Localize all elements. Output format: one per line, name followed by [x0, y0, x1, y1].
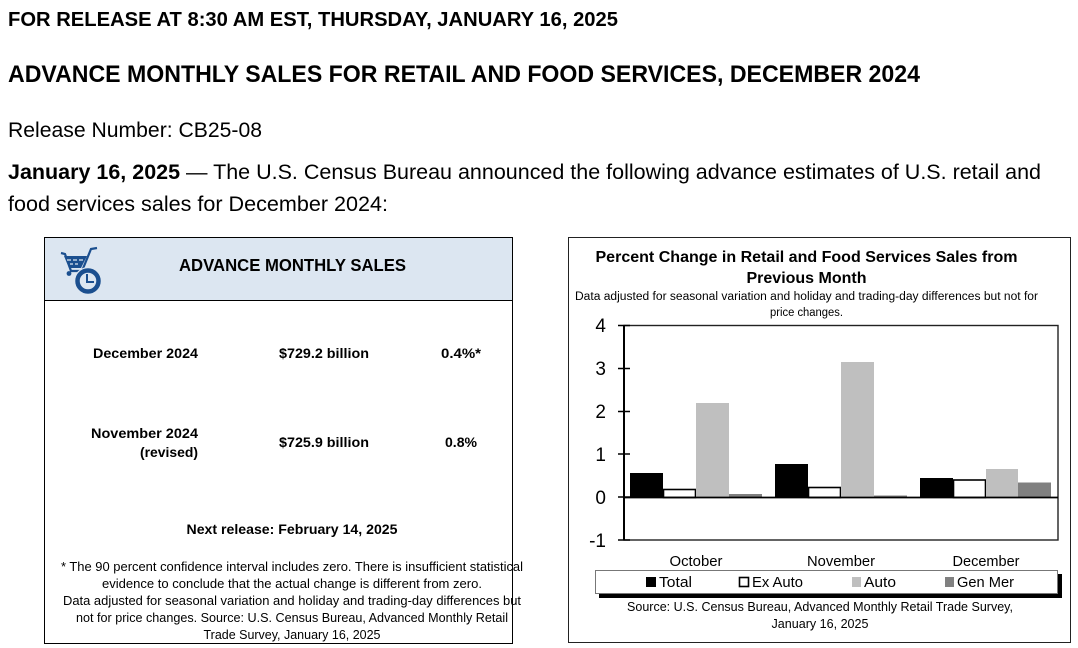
icon: shopping cart with clock: [61, 248, 102, 295]
next release: Next release: February 14, 2025: [186, 521, 398, 537]
chart title: Percent Change in Retail and Food Services Sales from: [596, 249, 1018, 266]
x axis labels: November: [807, 554, 875, 570]
y axis labels: [589, 316, 606, 552]
legend: Auto: [852, 575, 896, 591]
y axis labels: 4: [595, 316, 606, 337]
chart title: [596, 249, 1018, 287]
footnote: * The 90 percent confidence interval includes zero. There is insufficient statistical: [61, 560, 523, 574]
panel: percent change chart: [568, 238, 1070, 642]
row: November 2024 revised: $725.9 billion: [279, 434, 369, 450]
main title: ADVANCE MONTHLY SALES FOR RETAIL AND FOOD SERVICES, DECEMBER 2024: [8, 61, 921, 88]
legend: [596, 570, 1062, 598]
panel header: [44, 238, 512, 300]
chart source: Source: U.S. Census Bureau, Advanced Monthly Retail Trade Survey,: [627, 600, 1013, 614]
panel: advance monthly sales: [44, 238, 523, 644]
chart title: Previous Month: [746, 270, 866, 287]
footnote: [61, 560, 523, 642]
December bars: [920, 469, 1051, 498]
y axis labels: 1: [595, 445, 606, 466]
chart source: January 16, 2025: [772, 617, 869, 631]
bar chart: [624, 362, 1058, 498]
row: November 2024 revised: (revised): [140, 444, 198, 460]
row: November 2024 revised: 0.8%: [445, 434, 478, 450]
x axis labels: December: [952, 554, 1020, 570]
November bars: [775, 362, 907, 498]
x axis labels: October: [670, 554, 723, 570]
October bars: [630, 403, 762, 498]
intro paragraph: food services sales for December 2024:: [8, 193, 388, 216]
intro paragraph: [8, 161, 1041, 216]
footnote: evidence to conclude that the actual change is different from zero.: [102, 577, 482, 591]
footnote: not for price changes. Source: U.S. Census Bureau, Advanced Monthly Retail: [76, 611, 508, 625]
row: December 2024: December 2024: [93, 345, 198, 361]
row: December 2024: [93, 345, 482, 361]
plot frame and axes: [618, 326, 1058, 540]
row: December 2024: 0.4%*: [441, 345, 482, 361]
y axis labels: -1: [589, 531, 606, 552]
intro paragraph: January 16, 2025 — The U.S. Census Bureau announced the following advance estimates of U.S. retail and: [8, 161, 1041, 184]
legend: Total: [646, 575, 692, 591]
release number: Release Number: CB25-08: [8, 119, 262, 142]
footnote: Trade Survey, January 16, 2025: [204, 628, 381, 642]
chart subtitle: price changes.: [770, 307, 843, 319]
y axis labels: 3: [595, 359, 606, 380]
legend: Gen Mer: Gen Mer: [957, 575, 1014, 591]
footnote: Data adjusted for seasonal variation and holiday and trading-day differences but: [63, 594, 522, 608]
legend: Auto: Auto: [864, 575, 896, 591]
chart source: [627, 600, 1013, 631]
chart subtitle: [575, 291, 1038, 319]
legend: Ex Auto: Ex Auto: [752, 575, 803, 591]
y axis labels: 0: [595, 488, 606, 509]
row: December 2024: $729.2 billion: [279, 345, 369, 361]
y axis labels: 2: [595, 402, 606, 423]
release line: FOR RELEASE AT 8:30 AM EST, THURSDAY, JANUARY 16, 2025: [8, 9, 618, 31]
chart subtitle: Data adjusted for seasonal variation and holiday and trading-day differences but not for: [575, 291, 1038, 303]
x axis labels: [670, 554, 1020, 570]
row: November 2024 revised: November 2024: [91, 425, 198, 441]
row: November 2024 revised: [91, 425, 478, 460]
panel heading: ADVANCE MONTHLY SALES: [179, 255, 406, 275]
legend: Total: Total: [659, 575, 692, 591]
